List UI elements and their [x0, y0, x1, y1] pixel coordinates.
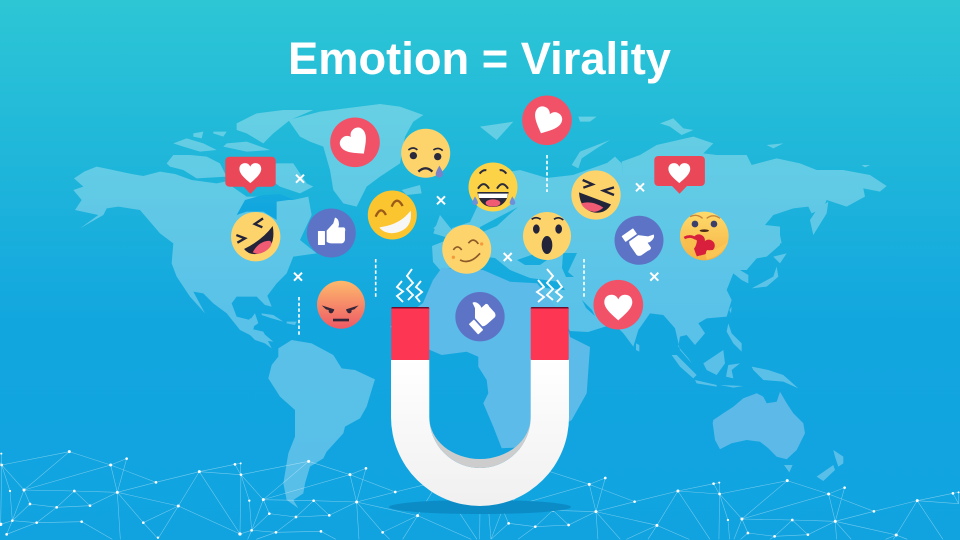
- thumb reaction right: [615, 216, 663, 265]
- Australia: [713, 392, 805, 459]
- big smile emoji: [368, 191, 417, 239]
- heart reaction top left: [330, 117, 380, 167]
- left pole: [391, 307, 429, 360]
- magnet body: [391, 360, 569, 506]
- title: Emotion = Virality: [288, 33, 671, 84]
- world map: [73, 104, 887, 508]
- thumb reaction centre: [455, 292, 505, 341]
- sad emoji: [401, 129, 450, 178]
- smiling emoji: [442, 225, 491, 274]
- network mesh: [0, 440, 960, 539]
- magnet: [389, 307, 571, 514]
- angry emoji: [317, 281, 365, 329]
- laughing emoji right: [571, 170, 621, 220]
- laughing emoji left: [231, 212, 280, 261]
- like badge right: [654, 156, 705, 194]
- heart reaction top: [522, 95, 572, 145]
- Africa: [390, 268, 590, 448]
- thumb reaction left: [307, 209, 356, 257]
- laughing with tears emoji: [469, 163, 517, 211]
- right pole: [531, 307, 569, 360]
- surprised emoji: [523, 212, 571, 260]
- dashed connectors: [299, 155, 584, 335]
- magnet waves right: [537, 269, 562, 302]
- magnet shadow: [389, 500, 571, 514]
- inner shadow: [429, 417, 531, 468]
- Europe: [432, 163, 625, 300]
- heart reaction right: [593, 280, 643, 330]
- cross marks: [294, 175, 658, 281]
- seas: [237, 194, 595, 316]
- magnet waves left: [397, 269, 422, 302]
- like badge left: [225, 157, 276, 194]
- care emoji: [680, 212, 729, 262]
